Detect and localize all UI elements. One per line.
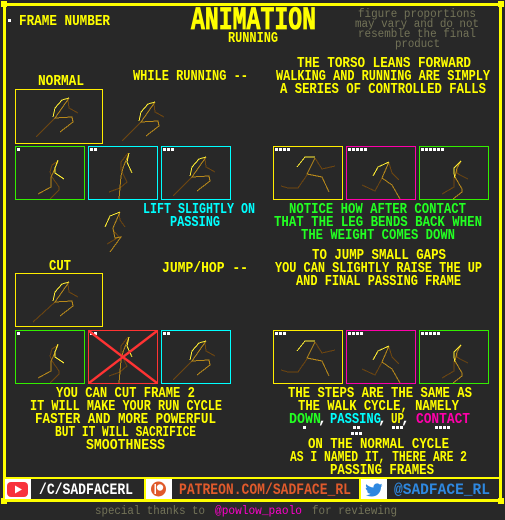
footer bar [3,477,502,499]
text: you can cut frame 2: IT WILL MAKE YOUR RUN CYCLE [30,398,222,415]
panel: normal frame 1 [16,146,84,200]
text: you can cut frame 2: YOU CAN CUT FRAME 2 [56,385,195,402]
text: lift slightly on passing [143,201,255,231]
panel: cut frame 1 [16,330,84,384]
heading: cut: CUT [49,258,71,275]
disclaimer note: product [395,38,440,51]
panel: normal frame 2 [88,146,158,200]
text: on the normal cycle: ON THE NORMAL CYCLE [308,436,449,453]
text: the steps are the same: CONTACT [416,411,470,428]
text: to jump small gaps [275,247,482,290]
text: you can cut frame 2: BUT IT WILL SACRIFICE [55,424,196,441]
disclaimer note: resemble the final [358,28,476,41]
panel: normal frame 6 [420,146,488,200]
heading: jump/hop: JUMP/HOP -- [162,260,248,277]
text: the steps are the same: DOWN [289,411,321,428]
icon: patreon [151,482,166,496]
figure: passing pose lifted [105,212,125,252]
panel: normal frame 5 [346,146,416,200]
text: on the normal cycle: PASSING FRAMES [330,462,434,479]
text: the steps are the same [288,385,472,428]
text: notice how after contact: NOTICE HOW AFTER CONTACT [289,201,466,218]
credits line: @powlow_paolo [215,505,302,518]
text: to jump small gaps: AND FINAL PASSING FRAME [296,273,461,290]
disclaimer note: may vary and do not [355,18,479,31]
figure: while running lean [122,102,164,141]
text: lift slightly on passing: PASSING [170,214,220,231]
title: RUNNING [228,30,278,47]
panel: cut frame 6 [420,330,488,384]
text: the steps are the same: THE WALK CYCLE, NAMELY [298,398,459,415]
text: on the normal cycle [290,436,467,479]
panel: cut frame 4 [274,330,342,384]
text: notice how after contact [274,201,482,244]
panel: cut key pose [16,274,102,326]
text: you can cut frame 2: FASTER AND MORE POWERFUL [35,411,216,428]
panel: cut frame 5 [346,330,416,384]
credits line [95,505,397,518]
text: lift slightly on passing: LIFT SLIGHTLY ON [143,201,255,218]
text: to jump small gaps: TO JUMP SMALL GAPS [312,247,446,264]
text: the steps are the same: PASSING [330,411,381,428]
link: youtube channel: /C/SADFACERL [39,481,133,499]
title [191,2,316,47]
text: the steps are the same: UP [391,411,404,428]
text: notice how after contact: THE WEIGHT COMES DOWN [301,227,455,244]
panel: cut frame 2 crossed out [88,330,158,384]
legend: frame number: FRAME NUMBER [19,13,110,30]
text: the steps are the same: , [378,411,387,428]
text: you can cut frame 2 [30,385,222,454]
panel: normal frame 3 [162,146,230,200]
disclaimer note [355,8,479,51]
panel: cut frame 3 [162,330,230,384]
panel: normal frame 4 [274,146,342,200]
heading: while running: WHILE RUNNING -- [133,68,248,85]
text: the steps are the same: , [318,411,327,428]
credits line: special thanks to [95,505,205,518]
disclaimer note: figure proportions [358,8,476,21]
text: you can cut frame 2: SMOOTHNESS [86,437,165,454]
text: the steps are the same: , [401,411,410,428]
text: torso leans forward: THE TORSO LEANS FORWARD [297,55,471,72]
icon: youtube [7,482,28,497]
heading: normal: NORMAL [38,73,84,90]
title: ANIMATION [191,2,316,39]
panel: normal key pose [16,90,102,144]
text: torso leans forward [276,55,490,98]
icon: twitter [366,483,382,497]
link: patreon: PATREON.COM/SADFACE_RL [179,481,351,499]
credits line: for reviewing [312,505,397,518]
link: twitter: @SADFACE_RL [394,481,490,499]
legend: frame number markers [303,426,450,435]
